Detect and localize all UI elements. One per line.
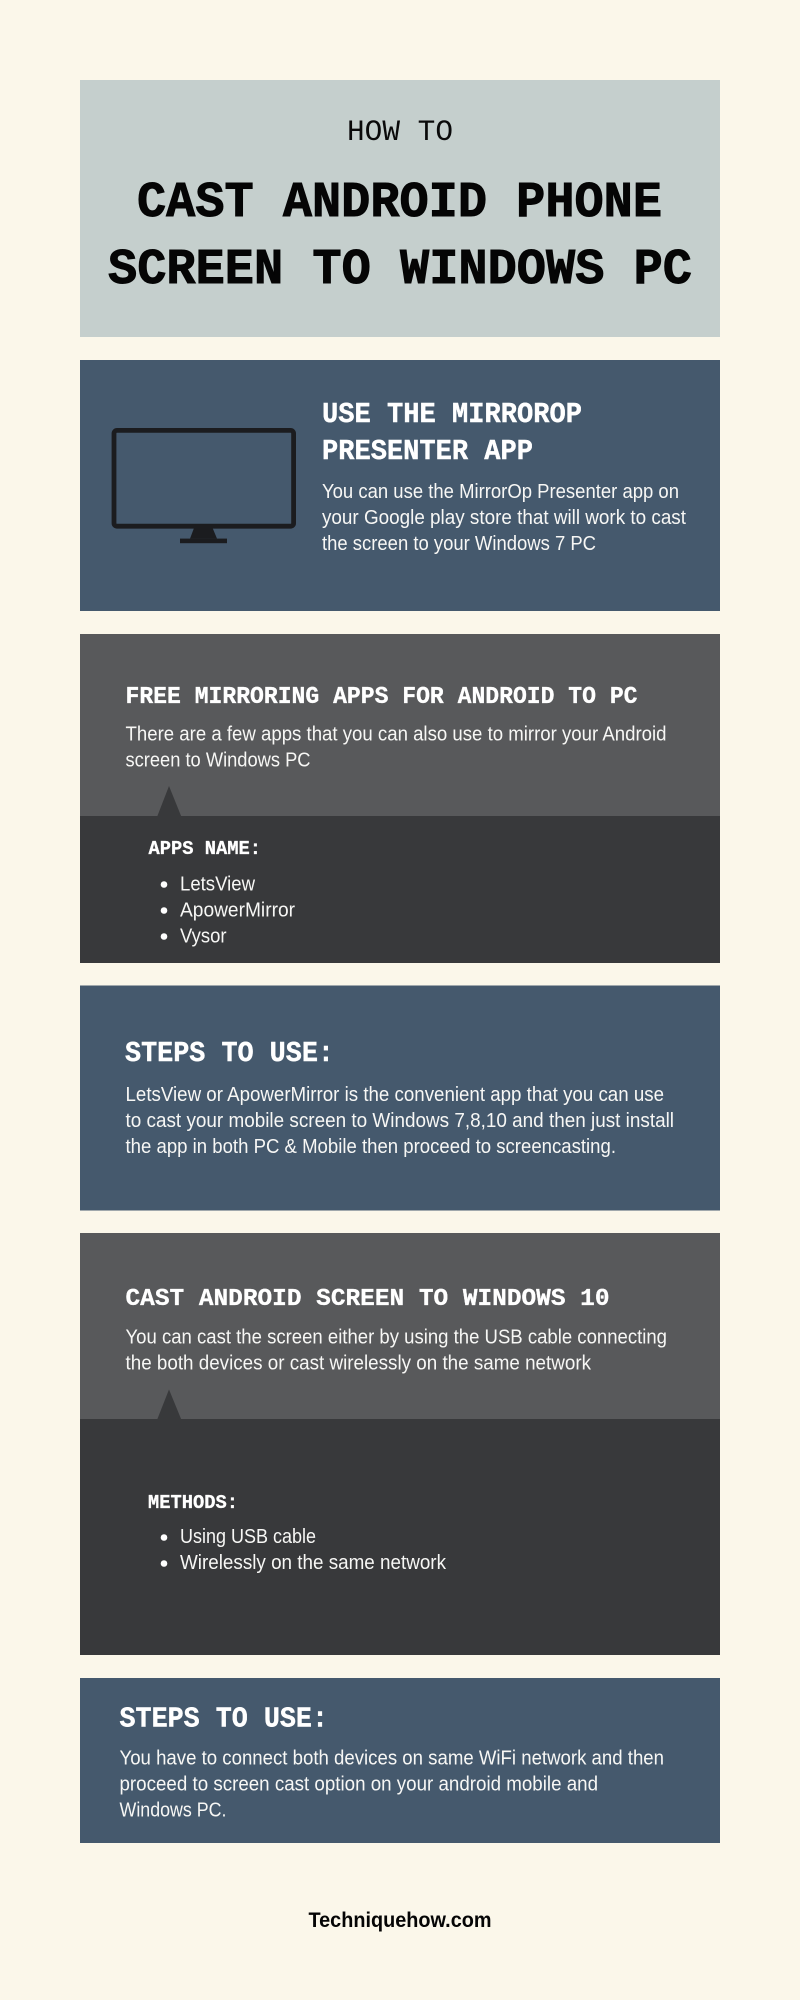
heading: use the MirrorOp presenter app [322, 398, 582, 468]
callout pointer [157, 1390, 182, 1420]
body text: the app in both PC & Mobile then proceed to screencasting. [126, 1136, 616, 1158]
kicker: how to: HOW TO [347, 116, 453, 150]
panel: cast to windows 10 [80, 1233, 720, 1655]
title heading: SCREEN TO WINDOWS PC [108, 242, 692, 299]
panel: title [80, 80, 720, 337]
callout pointer [157, 786, 182, 817]
icon: monitor [114, 430, 294, 543]
title heading [108, 175, 692, 299]
list: methods: Wirelessly on the same network [180, 1552, 447, 1574]
panel: free mirroring apps [80, 634, 720, 963]
list: app names: LetsView [180, 874, 256, 896]
heading: steps to use: STEPS TO USE: [120, 1702, 328, 1736]
list: app names: Vysor [180, 926, 227, 948]
body text [120, 1748, 664, 1822]
list: app names [161, 874, 295, 948]
footer: site name: Techniquehow.com [308, 1909, 492, 1932]
body text: You can use the MirrorOp Presenter app on [322, 481, 679, 503]
heading: steps to use: STEPS TO USE: [125, 1037, 334, 1070]
body text: proceed to screen cast option on your android mobile and [120, 1774, 598, 1796]
panel: steps to use 1 [80, 986, 720, 1210]
list: methods [161, 1526, 447, 1574]
body text: screen to Windows PC [126, 750, 310, 772]
list: app names: ApowerMirror [180, 900, 295, 922]
body text: to cast your mobile screen to Windows 7,8,10 and then just install [126, 1110, 674, 1132]
heading: cast android screen to windows 10: CAST ANDROID SCREEN TO WINDOWS 10 [126, 1286, 610, 1313]
body text: Windows PC. [120, 1800, 226, 1822]
body text: There are a few apps that you can also use to mirror your Android [126, 724, 666, 746]
body text: the screen to your Windows 7 PC [322, 533, 596, 555]
body text: LetsView or ApowerMirror is the convenient app that you can use [126, 1084, 664, 1106]
body text [126, 1084, 674, 1158]
heading: use the MirrorOp presenter app: PRESENTER APP [322, 435, 533, 468]
body text: the both devices or cast wirelessly on the same network [126, 1352, 592, 1374]
list: methods: Using USB cable [180, 1526, 316, 1548]
body text: You have to connect both devices on same WiFi network and then [120, 1748, 664, 1770]
panel: steps to use 2 [80, 1678, 720, 1843]
title heading: CAST ANDROID PHONE [137, 175, 662, 232]
heading: use the MirrorOp presenter app: USE THE MIRROROP [322, 398, 582, 431]
body text: your Google play store that will work to cast [322, 507, 686, 529]
body text [126, 1326, 667, 1374]
subheading: methods: METHODS: [148, 1492, 238, 1514]
heading: free mirroring apps: FREE MIRRORING APPS FOR ANDROID TO PC [126, 684, 638, 711]
body text: You can cast the screen either by using the USB cable connecting [126, 1326, 667, 1348]
panel: MirrorOp Presenter app [80, 360, 720, 611]
body text [126, 724, 666, 772]
body text [322, 481, 686, 555]
subheading: apps name: APPS NAME: [148, 838, 261, 860]
